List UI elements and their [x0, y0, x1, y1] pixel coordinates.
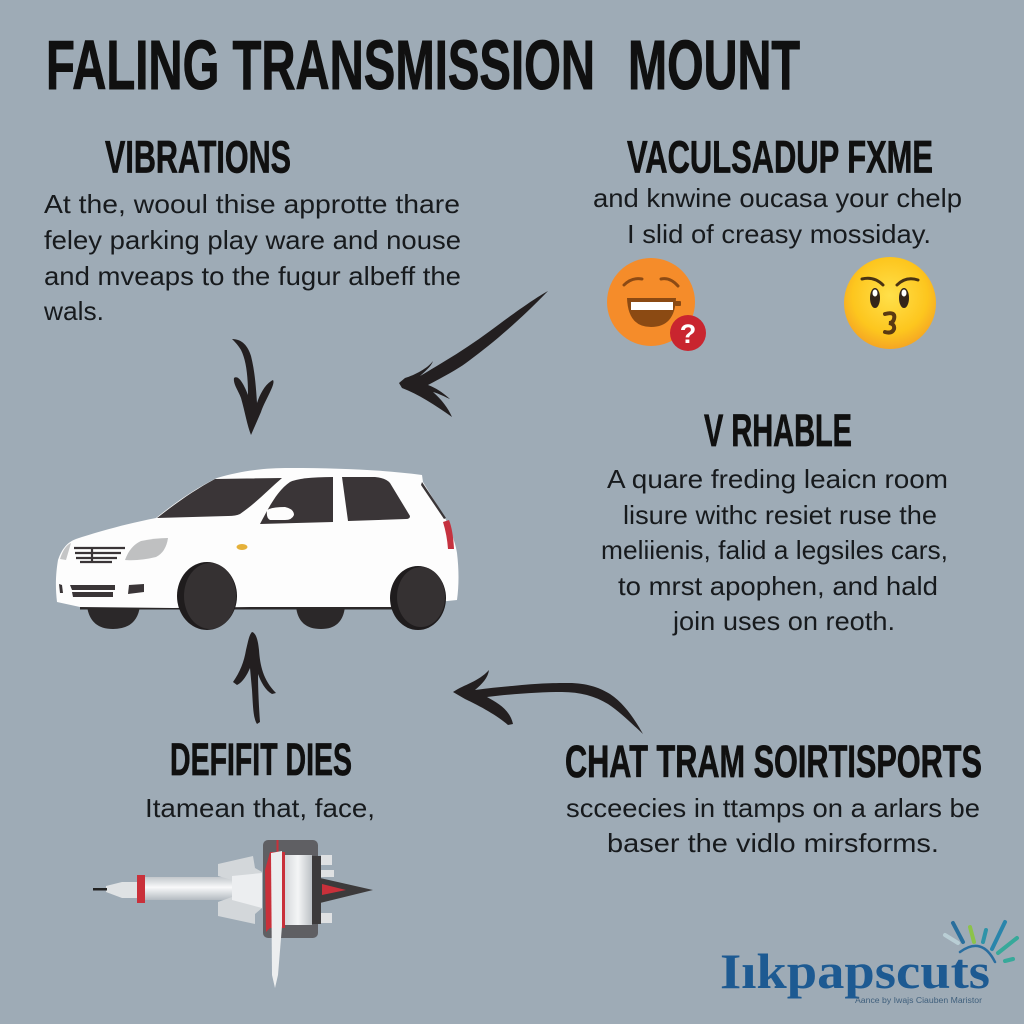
rear hatch edge — [421, 482, 446, 519]
illustration: transmission mount part — [93, 840, 373, 988]
logo wordmark: Iıkpapscuts — [720, 943, 990, 999]
panel: vibrations — [43, 132, 461, 326]
far headlight — [60, 543, 71, 560]
shaft — [144, 877, 232, 900]
text block: vibrations: At the, wooul thise approtte thare — [44, 189, 460, 219]
title: MOUNT — [628, 26, 800, 104]
logo — [720, 922, 1017, 1005]
mirror — [267, 507, 294, 520]
rear side window — [342, 477, 410, 521]
red collar — [137, 875, 145, 903]
panel: defifit dies — [145, 734, 375, 823]
arrow: top centre, pointing down to car — [232, 339, 274, 435]
front wheel — [177, 562, 237, 630]
text block: vaculsadup frame: and knwine oucasa your chelp — [593, 183, 962, 213]
title: FALING TRANSMISSION — [46, 26, 595, 104]
logo tagline: Aance by Iwajs Ciauben Maristor — [855, 996, 982, 1005]
flared housing — [218, 856, 262, 924]
text block: v rhable: meliienis, falid a legsiles cars, — [601, 535, 948, 565]
tip — [106, 882, 138, 898]
text block: v rhable: A quare freding leaicn room — [607, 464, 948, 494]
icon: laughing orange emoji with question badge: ? — [680, 319, 696, 349]
icon: kissing yellow emoji — [844, 257, 936, 349]
arrow: lower right, pointing left to car — [453, 670, 643, 734]
icon: laughing orange emoji with question badge — [607, 258, 706, 351]
red plate edges — [265, 852, 285, 932]
rear wheel — [390, 566, 446, 630]
arrow: upper right, pointing to car — [399, 291, 548, 417]
tail light — [443, 520, 454, 549]
turn signal — [236, 544, 248, 550]
windshield — [157, 478, 282, 518]
heading: vibrations: VIBRATIONS — [105, 132, 291, 182]
text block: v rhable: lisure withc resiet ruse the — [623, 500, 937, 530]
dark bracket — [263, 840, 318, 938]
text block: defifit dies: Itamean that, face, — [145, 793, 375, 823]
panel: v rhable — [601, 405, 948, 636]
car body — [56, 468, 459, 608]
panel: chat tram soirtisports — [565, 736, 982, 858]
text block: vaculsadup frame: I slid of creasy mossiday. — [627, 219, 931, 249]
logo rays — [945, 922, 1017, 962]
text block: v rhable: to mrst apophen, and hald — [618, 571, 938, 601]
text block: vibrations: wals. — [43, 296, 104, 326]
text block: chat tram soirtisports: scceecies in ttamps on a arlars be — [566, 793, 980, 823]
bearing — [284, 855, 312, 925]
vertical plate — [271, 851, 282, 988]
text block: vibrations — [43, 189, 461, 326]
bolts — [321, 855, 334, 923]
text block: chat tram soirtisports: baser the vidlo mirsforms. — [607, 828, 939, 858]
illustration: white hatchback car — [56, 468, 459, 630]
text block: v rhable: join uses on reoth. — [672, 606, 895, 636]
cone spike — [320, 878, 373, 903]
grille — [74, 548, 125, 562]
far wheels — [87, 606, 345, 629]
lower grille — [70, 585, 115, 597]
headlight — [125, 538, 168, 560]
fog lamp — [128, 584, 144, 594]
heading: v rhable: V RHABLE — [704, 405, 852, 456]
heading: defifit dies: DEFIFIT DIES — [170, 734, 352, 785]
text block: vibrations: feley parking play ware and nouse — [44, 225, 461, 255]
text block: vibrations: and mveaps to the fugur albeff the — [44, 261, 461, 291]
text block: v rhable — [601, 464, 948, 636]
text block: vaculsadup frame — [593, 183, 962, 249]
arrow: bottom centre, pointing up to car — [233, 632, 276, 724]
front side window — [260, 477, 333, 524]
panel: vaculsadup frame — [593, 132, 962, 351]
text block: chat tram soirtisports — [566, 793, 980, 858]
